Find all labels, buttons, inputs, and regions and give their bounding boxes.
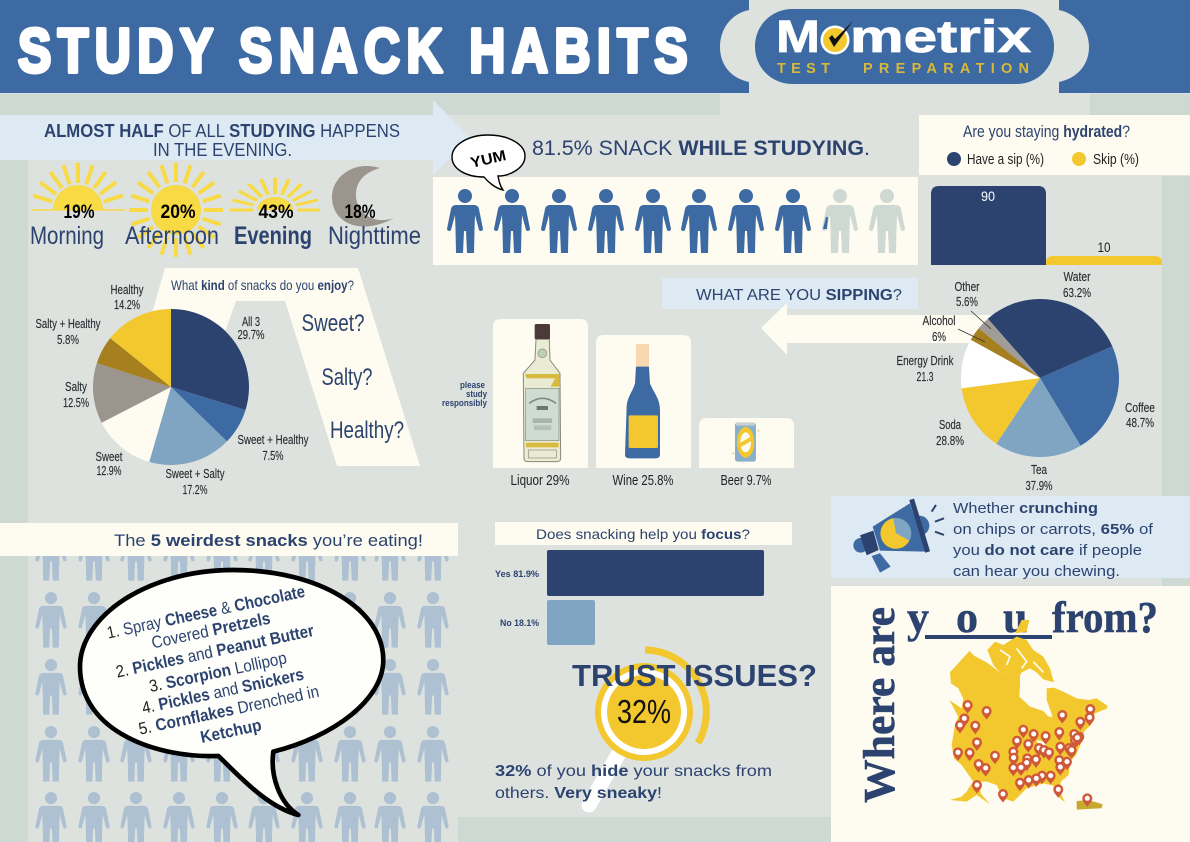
pie chart: drinks: 37.9% [1026,479,1052,493]
pie chart: snack kinds: Healthy [110,283,144,297]
panel: evening arrow banner [0,100,470,175]
panel: crunching callout: can hear you chewing. [953,563,1120,580]
panel: evening arrow banner: ALMOST HALF OF ALL STUDYING HAPPENS [44,120,400,141]
heading: you from: y [907,593,929,642]
pie chart: snack kinds: 12.5% [63,396,89,410]
panel: hydrated legend [919,115,1190,175]
logo [755,9,1054,84]
logo: metrix [850,11,1031,62]
panel: hydrated legend: Have a sip (%) [967,152,1044,168]
text: hide snacks: others. Very sneaky ! [495,785,662,802]
speech bubble: weirdest snacks list: 5. Cornflakes Drenched in [137,682,321,739]
pie chart: snack kinds: Sweet + Healthy [238,433,309,447]
header band [0,0,1190,93]
note: please study responsibly: responsibly [442,398,488,409]
heading: where are: Where are [855,607,904,803]
pie chart: snack kinds: All 3 [242,315,260,329]
pie chart: snack kinds [36,283,309,497]
icon: moon [332,166,394,227]
bar chart: focus [495,550,764,645]
pie chart: snack kinds: 5.8% [57,333,79,347]
bar chart: focus: No 18.1% [500,618,540,629]
heading: weirdest snacks [0,523,458,556]
pie chart: drinks: Other [954,280,980,294]
pie chart: drinks: Coffee [1125,401,1155,415]
pie chart: snack kinds: Sweet [96,450,123,464]
pie chart: snack kinds: Salty + Healthy [36,317,101,331]
pie chart: snack kinds: 29.7% [238,328,264,342]
time of day stats: 18% [344,202,376,223]
label: beer: Beer 9.7% [720,473,772,489]
pie chart: snack kinds: 7.5% [262,449,284,463]
yum speech bubble [452,135,525,190]
panel: wine [596,335,691,468]
panel: snack kind cream shape: Salty? [322,364,372,391]
note: please study responsibly [442,380,488,409]
pie chart: snack kinds: 17.2% [182,483,208,497]
heading: what are you sipping [662,278,918,309]
icon: morning sun [31,163,125,210]
time of day stats [30,202,421,250]
heading: snack stat: 81.5% SNACK WHILE STUDYING. [532,137,870,160]
bar chart: hydration: 10 [1098,239,1111,255]
pie chart: drinks: Alcohol [922,314,956,328]
text: hide snacks [495,763,772,802]
time of day stats: Morning [30,222,104,250]
icon: evening sun [230,178,320,210]
map: north america [949,620,1107,810]
heading: weirdest snacks: The 5 weirdest snacks you’re eating! [114,531,423,550]
heading: trust issues: TRUST ISSUES? [572,658,817,693]
yum speech bubble: YUM [469,147,508,172]
speech bubble: weirdest snacks list: Ketchup [199,715,263,747]
panel: evening arrow banner: IN THE EVENING. [153,139,292,160]
panel: snack kind cream shape [150,268,420,466]
heading: you from: from? [1052,593,1158,642]
text: hide snacks: 32% of you hide your snacks from [495,763,772,780]
arrow: sipping [761,303,1000,355]
speech bubble: weirdest snacks list: Covered Pretzels [150,609,272,652]
pie chart: snack kinds: 14.2% [114,298,140,312]
logo: M [776,11,820,62]
panel: hydrated legend: Skip (%) [1093,152,1139,168]
panel: snack kind cream shape: Healthy? [330,417,404,444]
pie chart: drinks [896,270,1155,493]
pie chart: drinks: 21.3 [916,370,934,384]
icon: megaphone [853,499,944,573]
pie chart: drinks: Energy Drink [896,354,954,368]
speech bubble: weirdest snacks list [80,570,383,815]
panel: snack kind cream shape: What kind of snacks do you enjoy? [171,277,354,293]
logo: PREPARATION [863,61,1029,77]
icon: magnifying glass [589,650,706,805]
bar chart: hydration: 90 [981,188,995,204]
heading: you from [907,593,1158,642]
time of day stats: Nighttime [328,222,421,250]
panel: hydrated legend: Are you staying hydrated? [963,123,1130,141]
heading: focus: Does snacking help you focus? [536,526,750,542]
time of day stats: 20% [160,202,196,223]
panel: snack kind cream shape: Sweet? [302,310,364,337]
panel: crunching callout: Whether crunching [953,500,1098,517]
panel: where are you from [831,586,1190,842]
time of day stats: 19% [64,202,95,223]
time of day stats: Evening [234,222,312,250]
panel: crunching callout [831,496,1190,580]
pie chart: drinks: Soda [939,418,961,432]
panel: beer [699,418,794,468]
label: liquor: Liquor 29% [510,473,570,489]
pie chart: drinks: 63.2% [1063,286,1091,300]
pie chart: drinks: Tea [1031,463,1047,477]
speech bubble: weirdest snacks list: 2. Pickles and Peanut Butter [114,621,316,682]
bar chart: hydration [931,186,1162,265]
time of day stats: 43% [258,202,294,223]
pie chart: drinks: 48.7% [1126,416,1154,430]
panel: crunching callout: you do not care if people [953,542,1142,559]
icon: afternoon sun [129,163,223,257]
bar chart: focus: Yes 81.9% [495,569,540,580]
note: please study responsibly: please [460,380,485,391]
panel: crunching callout: on chips or carrots, 65% of [953,521,1154,538]
pie chart: snack kinds: Salty [65,380,88,394]
pie chart: snack kinds: 12.9% [96,464,122,478]
speech bubble: weirdest snacks list: 4. Pickles and Snickers [140,665,306,718]
pie chart: snack kinds: Sweet + Salty [166,467,225,481]
pie chart: drinks: Water [1064,270,1090,284]
heading: you from: o [956,593,978,642]
panel: liquor [493,319,588,468]
time of day stats: Afternoon [125,222,219,250]
stat: 32 percent: 32% [617,693,671,730]
heading: what are you sipping: WHAT ARE YOU SIPPING ? [696,287,902,304]
label: wine: Wine 25.8% [612,473,674,489]
pie chart: drinks: 6% [932,330,946,344]
speech bubble: weirdest snacks list: 3. Scorpion Lollipop [147,648,288,696]
people pattern [35,525,449,842]
heading: you from: u [1003,593,1027,642]
title: STUDY SNACK HABITS [18,17,694,86]
note: please study responsibly: study [466,389,488,400]
pie chart: drinks: 28.8% [936,434,964,448]
panel: people strip [433,177,918,265]
logo: TEST [777,61,830,77]
pie chart: drinks: 5.6% [956,295,978,309]
heading: focus [495,522,792,545]
speech bubble: weirdest snacks list: 1. Spray Cheese & Chocolate [105,582,307,643]
